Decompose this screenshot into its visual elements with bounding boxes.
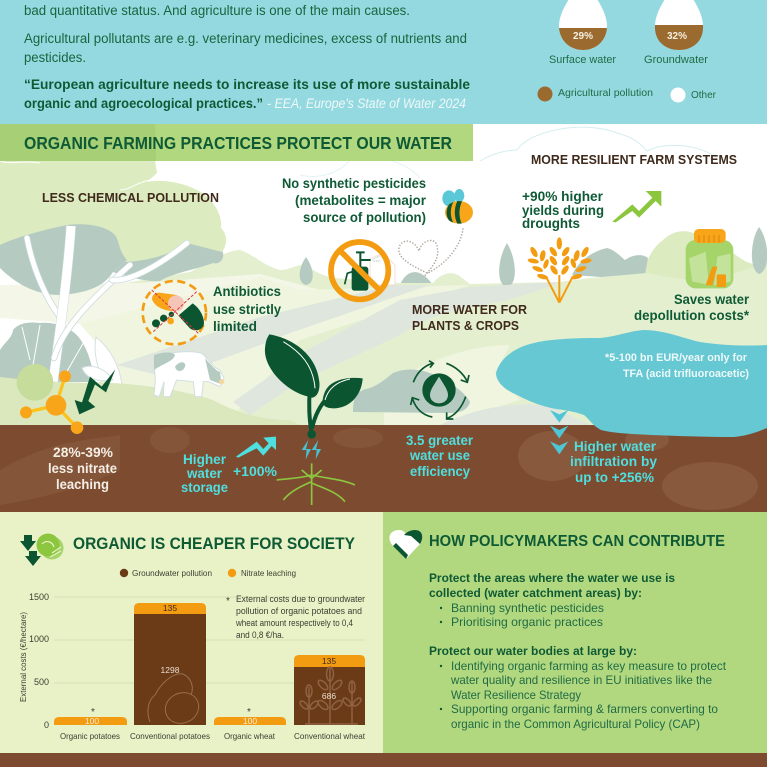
- intro text block: Agricultural pollutants are e.g. veterinary medicines, excess of nutrients and: [24, 31, 467, 46]
- bar chart: 1000: [29, 634, 49, 644]
- icon: water lightning marks: [302, 440, 321, 459]
- bar: conventional potatoes: [134, 603, 206, 729]
- icon: jar with savings: [686, 229, 733, 288]
- bar chart: Organic wheat: [224, 731, 276, 741]
- main heading: [0, 124, 473, 161]
- text: no synthetic pesticides: [282, 176, 427, 225]
- text: saves water depollution costs: [634, 292, 750, 323]
- chart footnote: wheat amount respectively to 0,4: [235, 618, 353, 628]
- water body: [496, 330, 767, 437]
- text: protect water catchment areas: [429, 571, 675, 629]
- text: protect water catchment areas: collected (water catchment areas) by:: [429, 586, 642, 600]
- text: water use efficiency: efficiency: [410, 464, 470, 479]
- chart: surface water drop: [549, 0, 616, 66]
- lower green hill: [0, 377, 300, 425]
- chart: groundwater drop: Groundwater: [644, 54, 708, 66]
- roots: [277, 463, 355, 505]
- note: TFA depollution costs: *5-100 bn EUR/year only for: [605, 352, 748, 364]
- text: protect water bodies: water quality and resilience in EU initiatives like the: [450, 673, 712, 687]
- intro text block: bad quantitative status. And agriculture is one of the main causes.: [24, 3, 410, 18]
- text: higher yields: yields during: [522, 202, 604, 218]
- bar chart: 1500: [29, 592, 49, 602]
- chart footnote: External costs due to groundwater: [236, 594, 365, 604]
- text: water infiltration: up to +256%: [575, 470, 654, 485]
- text: antibiotics: limited: [213, 319, 257, 334]
- text: water infiltration: Higher water: [574, 439, 657, 454]
- bar chart: 0: [44, 720, 49, 730]
- panel: intro on water status: [0, 0, 767, 124]
- text: antibiotics: Antibiotics: [213, 284, 281, 299]
- bar: conventional wheat: [294, 655, 365, 725]
- intro text block: organic and agroecological practices.”: [24, 96, 263, 111]
- text: saves water depollution costs: Saves water: [674, 292, 750, 307]
- chart: groundwater drop: 32%: [667, 31, 687, 42]
- heading: more water for plants and crops: MORE WATER FOR: [412, 302, 528, 317]
- legend: Groundwater pollution: [132, 568, 212, 578]
- arrow: yields up: [612, 191, 661, 222]
- text: higher yields: +90% higher: [522, 188, 604, 204]
- bar chart: External costs (€/hectare): [18, 612, 28, 702]
- icon: handshake heart: [389, 530, 422, 559]
- legend: Nitrate leaching: [241, 568, 296, 578]
- bar chart: *: [247, 707, 251, 718]
- plant: [265, 334, 363, 505]
- white leaves: [82, 337, 122, 385]
- text: protect water bodies: [429, 644, 727, 731]
- intro text block: pesticides.: [24, 50, 86, 65]
- bar chart: *: [91, 707, 95, 718]
- chart: surface water drop: 29%: [573, 31, 593, 42]
- bar chart: 500: [34, 677, 49, 687]
- text: water infiltration: infiltration by: [570, 454, 657, 469]
- text: protect water bodies: Water Resilience Strategy: [451, 688, 581, 702]
- panel: farm landscape scene: [0, 124, 767, 513]
- text: nitrate leaching: leaching: [56, 477, 109, 492]
- text: nitrate leaching: [48, 445, 117, 492]
- heading: more resilient farm systems: MORE RESILIENT FARM SYSTEMS: [531, 152, 737, 167]
- icon: no pesticide sprayer: [331, 242, 395, 299]
- icon: infiltration chevrons: [550, 410, 568, 454]
- legend: pollution share: Other: [691, 89, 716, 101]
- bar chart: Conventional wheat: [294, 731, 366, 741]
- text: antibiotics: [213, 284, 281, 334]
- text: higher water storage: water: [186, 465, 223, 481]
- text: higher water storage: +100%: [233, 463, 278, 479]
- text: saves water depollution costs: depollution costs*: [634, 308, 750, 323]
- text: protect water catchment areas: Protect the areas where the water we use is: [429, 571, 675, 585]
- text: higher yields: [522, 188, 604, 231]
- bar: conventional potatoes: 1298: [161, 665, 180, 675]
- panel: how policymakers can contribute: [383, 512, 767, 753]
- landscape backdrop: [0, 127, 767, 425]
- icon: antibiotics limited: [143, 281, 206, 344]
- bar: conventional potatoes: 135: [163, 603, 177, 613]
- chart: surface water drop: Surface water: [549, 54, 616, 66]
- intro text block: “European agriculture needs to increase its use of more sustainable: [24, 77, 470, 92]
- legend: [120, 568, 296, 578]
- tree trunk and branches: [27, 226, 187, 425]
- bar: organic wheat: 100: [243, 716, 257, 726]
- main heading: ORGANIC FARMING PRACTICES PROTECT OUR WATER: [24, 133, 452, 153]
- text: higher yields: droughts: [522, 215, 580, 231]
- text: water use efficiency: [406, 433, 474, 479]
- heading: ORGANIC IS CHEAPER FOR SOCIETY: [73, 535, 355, 553]
- arrow: water storage up: [236, 437, 276, 458]
- icon: water cycle: [411, 361, 469, 419]
- text: higher water storage: storage: [181, 479, 228, 495]
- text: higher water storage: [181, 451, 278, 495]
- text: no synthetic pesticides: source of pollution): [303, 210, 426, 225]
- heading: HOW POLICYMAKERS CAN CONTRIBUTE: [429, 533, 725, 550]
- note: TFA depollution costs: TFA (acid trifluoroacetic): [623, 368, 749, 380]
- chart footnote: and 0,8 €/ha.: [236, 630, 284, 640]
- chart footnote: pollution of organic potatoes and: [236, 606, 362, 616]
- note: TFA depollution costs: [605, 352, 749, 380]
- text: no synthetic pesticides: No synthetic pesticides: [282, 176, 426, 191]
- text: protect water bodies: Identifying organic farming as key measure to protect: [451, 659, 727, 673]
- soil footer band: [0, 753, 767, 767]
- bar chart: Conventional potatoes: [130, 731, 210, 741]
- text: nitrate leaching: 28%-39%: [53, 445, 113, 460]
- heading: less chemical pollution: LESS CHEMICAL POLLUTION: [42, 190, 219, 205]
- text: water use efficiency: water use: [409, 448, 470, 463]
- text: protect water bodies: Protect our water bodies at large by:: [429, 644, 637, 658]
- arrow: nitrate decrease: [75, 369, 115, 414]
- icon: nitrate molecule: [17, 364, 83, 434]
- text: water infiltration: [570, 439, 657, 485]
- chart footnote: *: [226, 596, 230, 607]
- text: no synthetic pesticides: (metabolites = major: [295, 193, 427, 208]
- intro text block: - EEA, Europe's State of Water 2024: [267, 96, 466, 111]
- panel: organic is cheaper for society: [0, 512, 383, 753]
- text: antibiotics: use strictly: [213, 302, 281, 317]
- text: water use efficiency: 3.5 greater: [406, 433, 474, 448]
- text: protect water bodies: Supporting organic farming & farmers converting to: [451, 702, 718, 716]
- icon: bee and dotted flight path: [399, 189, 473, 277]
- bar: conventional wheat: 686: [322, 691, 336, 701]
- bar: organic potatoes: [54, 716, 127, 726]
- bar: organic potatoes: 100: [85, 716, 99, 726]
- chart: groundwater drop: [644, 0, 708, 66]
- icon: coins and down arrows: [20, 534, 64, 566]
- text: protect water catchment areas: Banning synthetic pesticides: [451, 601, 604, 615]
- legend: pollution share: Agricultural pollution: [558, 87, 653, 99]
- soil band: [0, 425, 767, 513]
- text: nitrate leaching: less nitrate: [48, 461, 117, 476]
- legend: pollution share: [538, 86, 716, 102]
- bar chart: [18, 592, 366, 741]
- icon: grazing cow: [154, 352, 224, 397]
- icon: wheat ear: [527, 237, 592, 303]
- text: higher water storage: Higher: [183, 451, 227, 467]
- bar chart: Organic potatoes: [60, 731, 120, 741]
- heading: more water for plants and crops: PLANTS & CROPS: [412, 318, 519, 333]
- heading: more water for plants and crops: [412, 302, 528, 333]
- text: protect water bodies: organic in the Common Agricultural Policy (CAP): [451, 717, 700, 731]
- text: protect water catchment areas: Prioritising organic practices: [451, 615, 603, 629]
- intro text block: [24, 3, 470, 111]
- bar: conventional wheat: 135: [322, 656, 336, 666]
- chart footnote: [226, 594, 365, 640]
- bar: organic wheat: [214, 716, 286, 726]
